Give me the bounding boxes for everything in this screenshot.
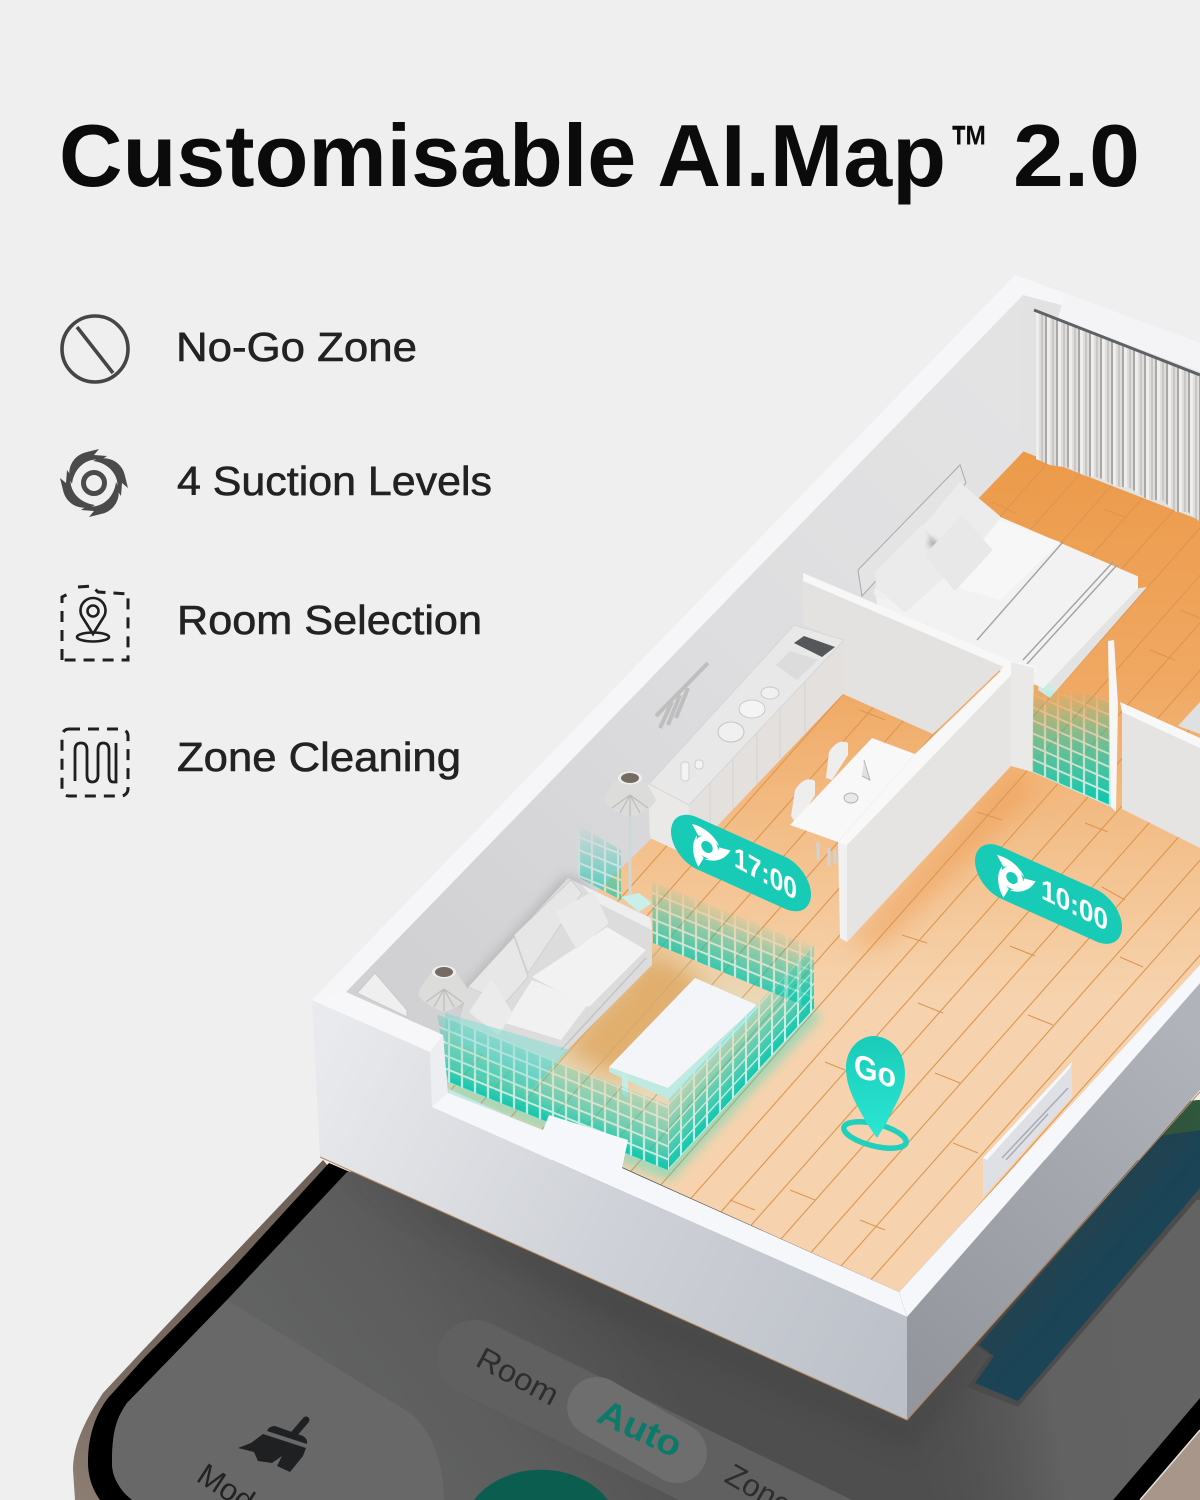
partition: top strip	[803, 573, 1036, 672]
door leaf	[1108, 640, 1118, 812]
icon: room pin in dashed frame	[62, 586, 128, 660]
wall base edge	[320, 1092, 1200, 1420]
partition: central wall end	[838, 840, 847, 942]
partition: right room top	[1120, 702, 1200, 748]
title: Customisable AI.Map	[59, 106, 946, 205]
table items	[844, 793, 858, 803]
outer wall: front face	[312, 1000, 907, 1420]
wall rack	[656, 663, 708, 728]
back wall: long inner face	[346, 295, 1023, 1040]
kitchen counter	[648, 625, 844, 856]
far wall above curtain	[1020, 295, 1200, 520]
no-go floor tint	[448, 943, 814, 1170]
pin ring	[841, 1117, 909, 1153]
outer wall: right face	[907, 983, 1200, 1420]
pin body	[846, 1036, 905, 1138]
no-go grid: right face	[668, 943, 814, 1170]
tag pill	[975, 835, 1122, 953]
wall top: front left corner	[312, 992, 443, 1052]
small far wall corner	[1178, 702, 1200, 734]
floor lamp: kitchen side	[604, 772, 656, 912]
headboard	[858, 465, 966, 596]
floor with planks	[444, 451, 1200, 1292]
icon: broom	[238, 1420, 307, 1472]
start button	[474, 1470, 608, 1500]
mode switch: auto pill	[568, 1377, 707, 1483]
coffee table	[609, 978, 757, 1100]
sofa shadow on wall	[455, 875, 590, 1010]
feature: room selection	[62, 586, 482, 660]
floor lamp: sofa side	[418, 966, 470, 1093]
sofa seats	[505, 980, 589, 1040]
bed base	[1038, 587, 1147, 698]
corner side table	[357, 973, 407, 1017]
sofa body	[455, 878, 652, 1082]
feature: no-go zone	[62, 316, 417, 382]
curtain	[1034, 310, 1200, 522]
bedding stripes	[977, 542, 1117, 664]
wall top: long white strip	[312, 275, 1065, 1000]
label: suction levels: 4 Suction Levels	[177, 458, 492, 504]
cookware	[739, 700, 765, 718]
sofa back cushions	[468, 937, 528, 1003]
table legs	[818, 842, 835, 866]
icon: no-go circle	[62, 316, 128, 382]
phone frame	[73, 1160, 1200, 1500]
schedule tag: 10:00	[975, 835, 1122, 953]
partition: right room wall	[1122, 709, 1200, 848]
swirl icon	[990, 853, 1036, 907]
label: auto: Auto	[592, 1391, 689, 1465]
bottles	[681, 762, 689, 781]
time text: 10:00	[1041, 872, 1108, 938]
schedule tag: 17:00	[671, 806, 811, 920]
app panel: bottom card	[100, 1300, 444, 1500]
door no-go grid	[1032, 693, 1111, 807]
wall vent	[983, 1062, 1072, 1197]
partition: central wall top	[838, 661, 1018, 845]
house model	[265, 275, 1200, 1450]
feature: suction levels	[60, 449, 492, 517]
dining set	[790, 738, 915, 866]
no-go tint over sofa	[445, 1013, 570, 1090]
title: 2.0	[1013, 106, 1140, 205]
wall top: front strip	[432, 1093, 907, 1317]
wall top: right strip	[899, 965, 1200, 1317]
label: no-go zone: No-Go Zone	[176, 324, 417, 370]
phone screen	[100, 1090, 1200, 1500]
no-go grid: back face	[652, 880, 814, 1010]
counter top	[649, 625, 844, 805]
mattress	[876, 517, 1137, 687]
wall post at front left	[430, 1035, 448, 1107]
pin text: Go	[854, 1047, 896, 1096]
partition: kitchen north wall	[803, 578, 1005, 734]
tag pill	[671, 806, 811, 920]
counter body	[689, 640, 844, 856]
table top	[790, 738, 915, 842]
pillows	[925, 485, 998, 542]
time text: 17:00	[734, 840, 797, 907]
phone	[73, 1090, 1200, 1500]
bed	[858, 465, 1147, 698]
title: ™	[950, 113, 989, 180]
sofa	[455, 878, 652, 1082]
wall top: window strip	[1058, 293, 1200, 372]
label: room: Room	[471, 1340, 565, 1412]
pillow left	[471, 982, 511, 1033]
door post	[1011, 662, 1034, 772]
sofa front rail	[561, 958, 646, 1050]
shadow beneath house	[1138, 1106, 1186, 1160]
sink	[794, 636, 835, 657]
no-go grid: corner piece	[578, 825, 621, 900]
mode switch: pill track	[495, 1326, 852, 1500]
icon: zone path in dashed frame	[62, 729, 128, 796]
shaded floor near walls	[560, 950, 710, 1080]
sofa arm	[582, 885, 652, 930]
feature list	[60, 316, 492, 796]
no-go grid: front face	[437, 1013, 668, 1170]
partition: central wall main side	[847, 672, 1011, 942]
label: zone cleaning: Zone Cleaning	[177, 734, 461, 780]
no-go zone glow	[448, 1012, 816, 1173]
chairs	[826, 742, 848, 780]
swirl icon	[685, 822, 731, 876]
bedding shade	[948, 520, 1060, 600]
map: pool region	[967, 1090, 1200, 1407]
pillow right	[557, 893, 607, 947]
feature: zone cleaning	[62, 729, 461, 796]
go pin	[841, 1036, 909, 1153]
label: room selection: Room Selection	[177, 597, 482, 643]
icon: suction swirl	[60, 449, 128, 517]
